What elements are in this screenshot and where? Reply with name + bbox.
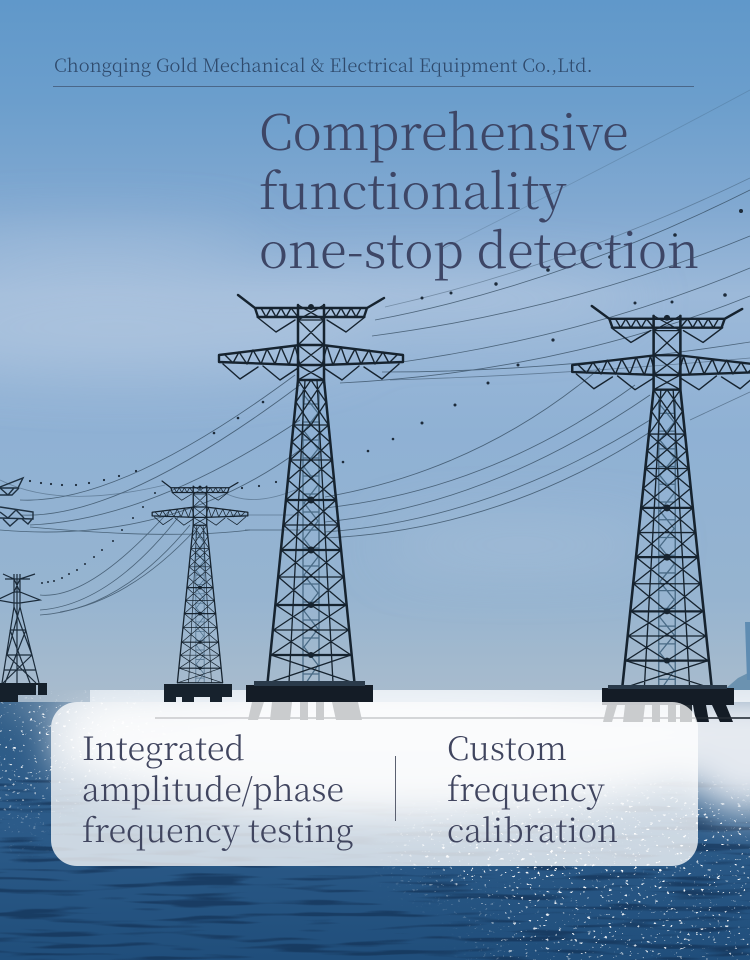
header: company name: Chongqing Gold Mechanical & Electrical Equipment Co.,Ltd. <box>54 52 593 78</box>
header rule <box>53 86 694 87</box>
right tower <box>572 306 750 722</box>
bright horizon <box>90 690 750 702</box>
feature: amplitude/phase testing: Integrated <box>82 724 245 770</box>
power lines <box>0 90 750 615</box>
panel: features <box>51 702 698 866</box>
middle tower <box>152 481 248 702</box>
feature: amplitude/phase testing: amplitude/phase <box>82 765 344 811</box>
sea <box>0 675 750 960</box>
left tower base <box>0 683 47 702</box>
distant pylon and hill <box>724 622 750 690</box>
feature: amplitude/phase testing: frequency testing <box>82 806 354 852</box>
title: functionality <box>259 153 566 224</box>
title: Comprehensive <box>259 94 629 165</box>
tower legs reflected in the water <box>155 702 750 722</box>
main tower <box>219 295 403 702</box>
left tower <box>0 574 40 683</box>
sky <box>0 0 750 700</box>
feature: custom calibration: calibration <box>447 806 618 852</box>
feature: custom calibration: Custom <box>447 724 567 770</box>
divider <box>395 756 396 821</box>
far-left tower arms <box>0 478 33 526</box>
feature: custom calibration <box>447 724 618 852</box>
feature: custom calibration: frequency <box>447 765 605 811</box>
feature: amplitude/phase testing <box>82 724 354 852</box>
insulators on the lines <box>29 209 743 584</box>
title: one-stop detection <box>259 212 699 283</box>
title <box>4 94 699 856</box>
